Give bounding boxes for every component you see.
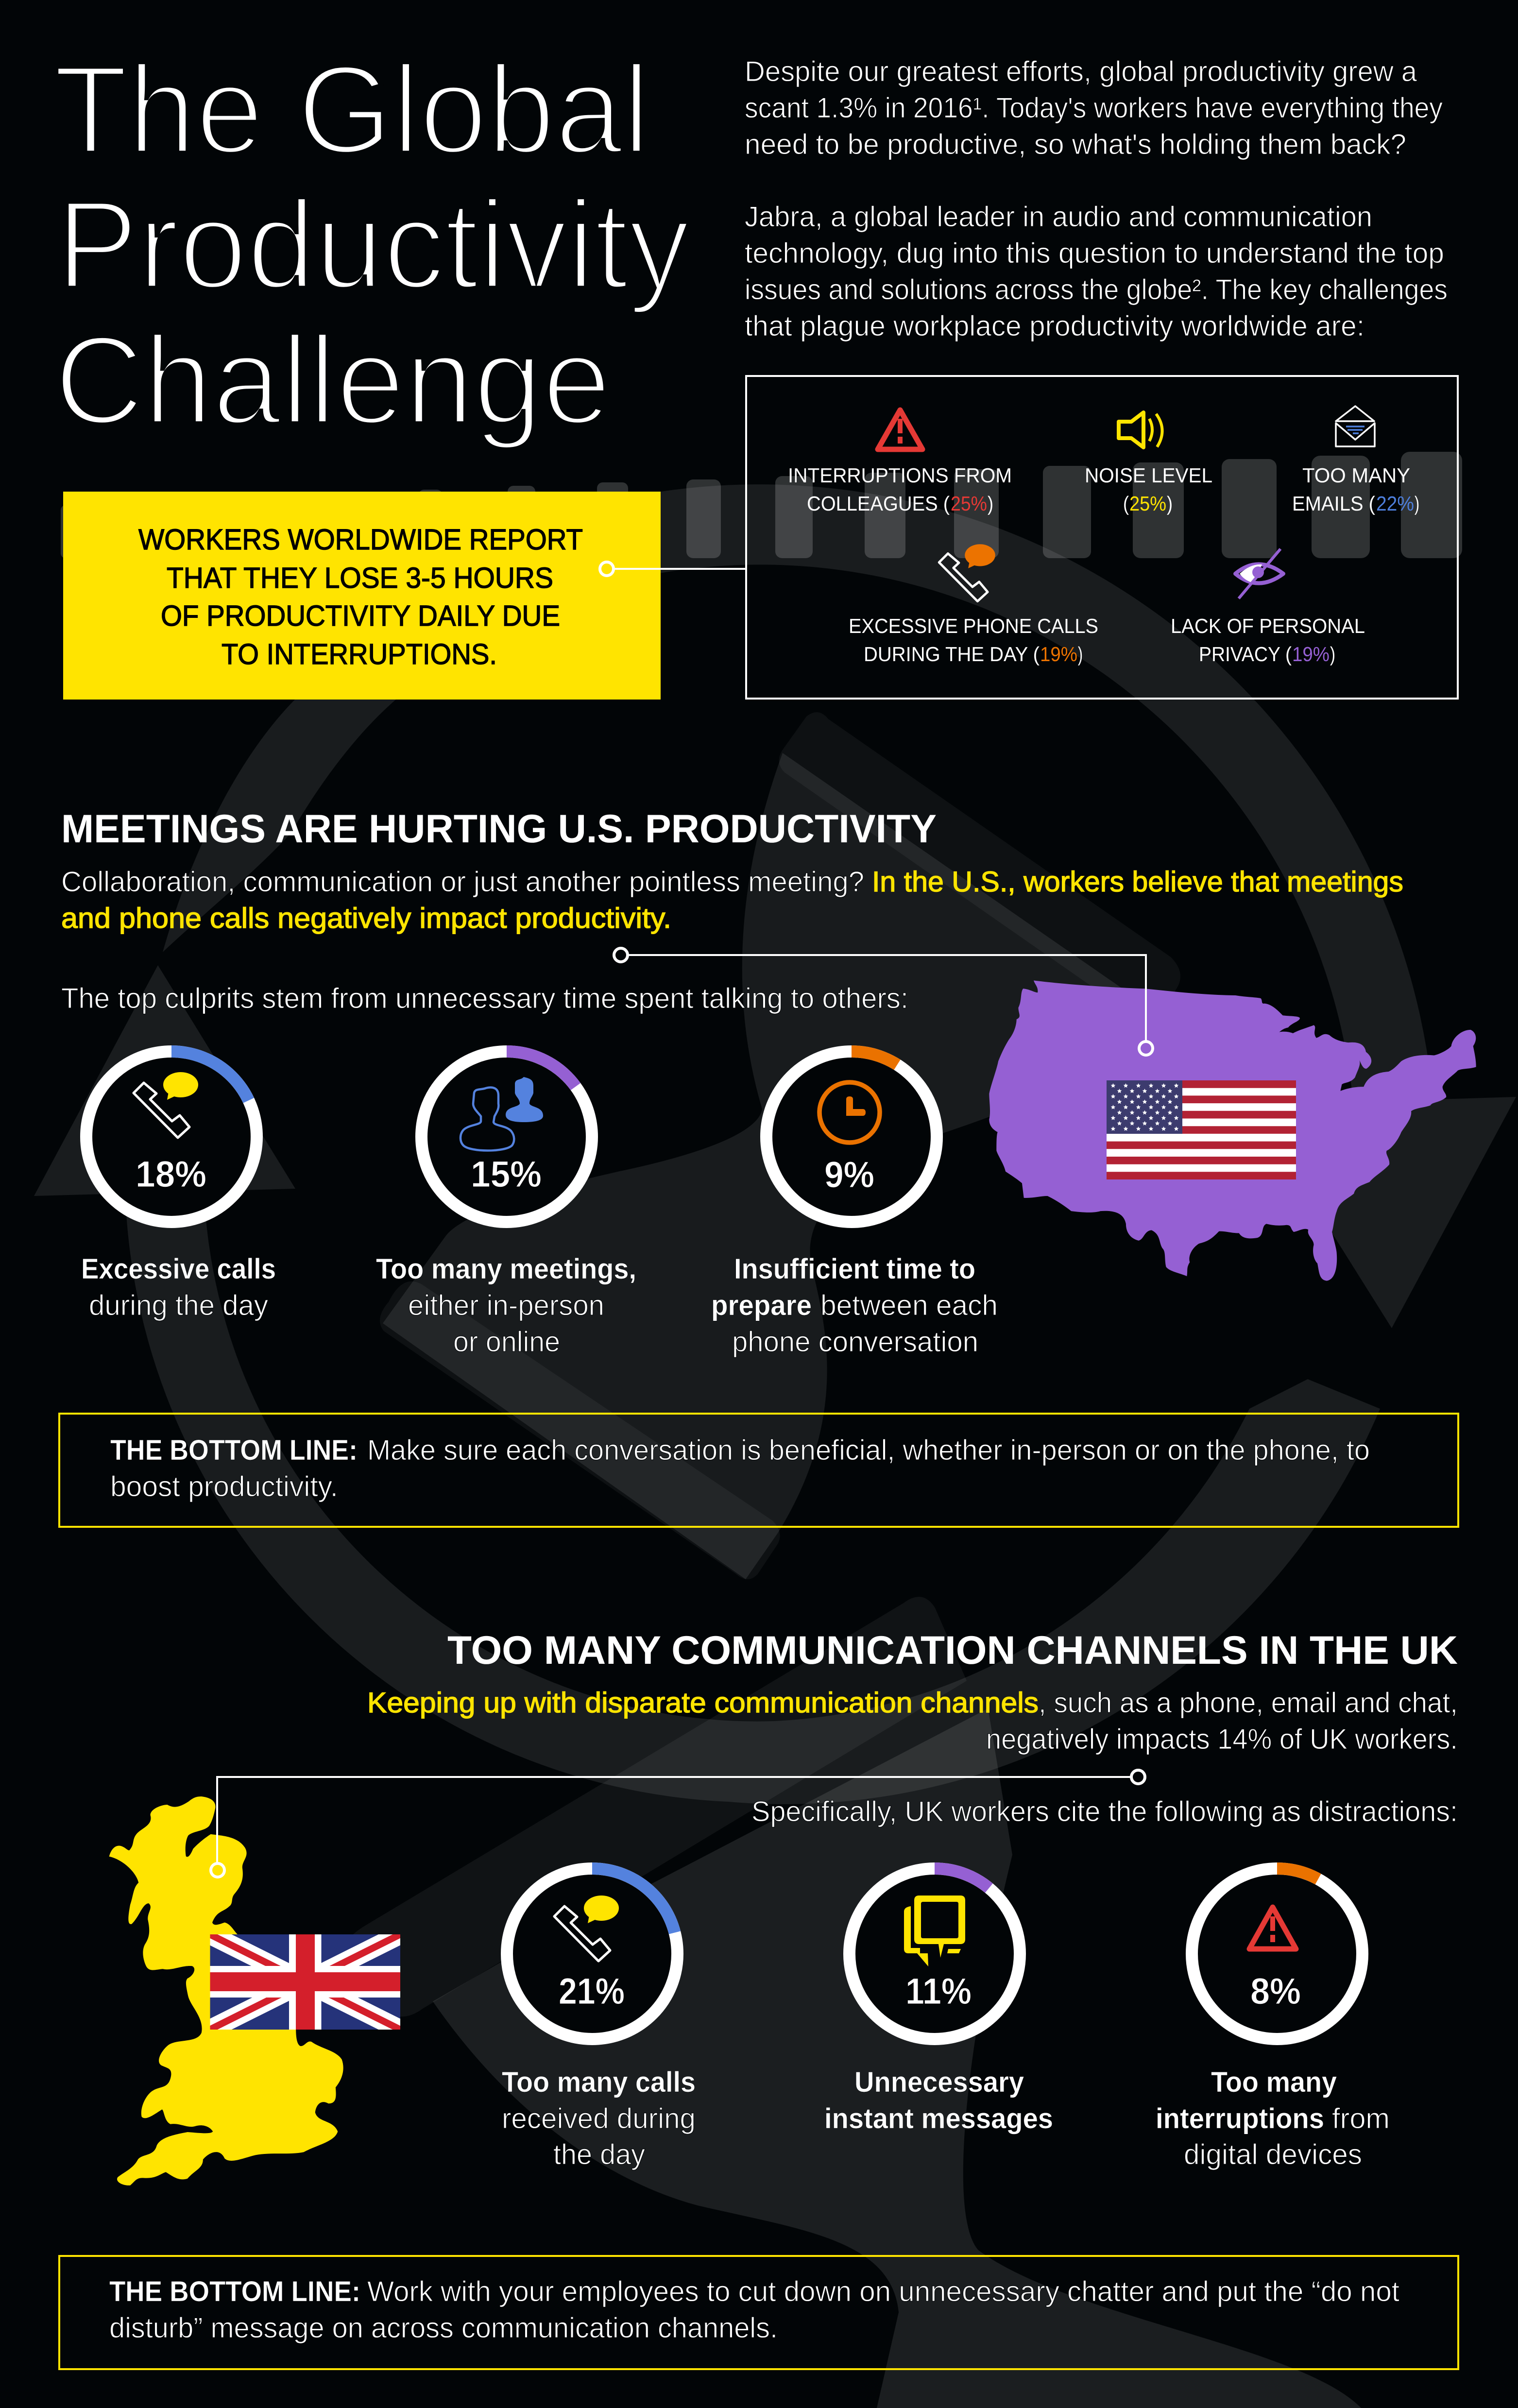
label: too many calls: received during [502, 2102, 696, 2135]
icon: phone with yellow bubble [554, 1896, 619, 1961]
icon: two people [461, 1077, 543, 1150]
value: 21% [559, 1971, 625, 2012]
chart: 18% excessive calls [86, 1051, 256, 1222]
text: meetings intro: The top culprits stem from unnecessary time spent talking to others: [61, 982, 908, 1014]
label: lack of personal privacy: PRIVACY ( [1199, 643, 1292, 666]
label: too many meetings: Too many meetings, [376, 1253, 636, 1285]
label: noise level: NOISE LEVEL [1085, 464, 1212, 487]
icon: phone with yellow bubble [134, 1072, 198, 1138]
icon: message bubbles [904, 1896, 965, 1966]
label: too many meetings: either in-person [408, 1289, 604, 1321]
label: excessive phone calls: 19% [1040, 643, 1077, 666]
intro text: technology, dug into this question to understand the top [745, 237, 1444, 269]
text: meetings intro: Collaboration, communication or just another pointless meeting? [61, 866, 864, 898]
panel: bottom line US: THE BOTTOM LINE: [110, 1434, 358, 1466]
label: excessive phone calls [849, 615, 1098, 666]
panel: bottom line US: boost productivity. [110, 1470, 338, 1503]
label: too many interruptions: from [1332, 2102, 1390, 2135]
panel: bottom line UK: Work with your employees to cut down on unnecessary chatter and put the “do not [367, 2275, 1399, 2307]
callout: yellow box: WORKERS WORLDWIDE REPORT [138, 523, 583, 556]
connector: UK map to text [211, 1770, 1145, 1877]
label: too many calls [502, 2066, 696, 2170]
label: excessive calls [81, 1253, 276, 1321]
label: too many interruptions: digital devices [1184, 2138, 1362, 2170]
label: unnecessary instant messages: instant messages [824, 2102, 1053, 2135]
panel: bottom line UK: disturb” message on across communication channels. [109, 2312, 778, 2344]
intro text: Despite our greatest efforts, global productivity grew a [745, 55, 1417, 87]
text: UK intro [367, 1687, 1458, 1827]
icon: warning triangle [878, 410, 922, 449]
value: 11% [905, 1971, 972, 2012]
intro text: issues and solutions across the globe². The key challenges [745, 273, 1448, 306]
title: Challenge [54, 310, 611, 451]
label: excessive phone calls: EXCESSIVE PHONE CALLS [849, 615, 1098, 637]
text: meetings intro [61, 866, 1403, 1014]
label: noise level [1085, 464, 1212, 515]
label: lack of personal privacy [1171, 615, 1365, 666]
panel: bottom line UK: THE BOTTOM LINE: [109, 2275, 360, 2307]
label: interruptions from colleagues [788, 464, 1012, 515]
label: excessive calls: Excessive calls [81, 1253, 276, 1285]
icon: crossed eye [1235, 549, 1283, 598]
label: insufficient time: Insufficient time to [734, 1253, 975, 1285]
label: excessive calls: during the day [89, 1289, 268, 1321]
map: USA [989, 980, 1476, 1281]
label: noise level: ( [1123, 492, 1129, 515]
chart: 21% too many calls [507, 1868, 677, 2039]
text: UK intro: Keeping up with disparate communication channels [367, 1687, 1039, 1719]
icon: warning triangle [1249, 1907, 1296, 1949]
flag: USA [1107, 1080, 1296, 1179]
intro text: Jabra, a global leader in audio and communication [745, 201, 1372, 233]
chart: 11% instant messages [849, 1868, 1020, 2039]
label: lack of personal privacy: 19% [1292, 643, 1330, 666]
label: interruptions from colleagues: 25% [951, 492, 987, 515]
intro text: that plague workplace productivity worldwide are: [745, 310, 1364, 342]
intro text: scant 1.3% in 2016¹. Today's workers have everything they [745, 92, 1443, 124]
watermark: circular arrows with hourglass [34, 484, 1516, 2408]
title: The Global [53, 39, 650, 180]
flag: UK [210, 1934, 400, 2030]
heading: UK channels: TOO MANY COMMUNICATION CHANNELS IN THE UK [447, 1628, 1458, 1673]
chart: 15% too many meetings [422, 1051, 592, 1222]
label: lack of personal privacy: LACK OF PERSONAL [1171, 615, 1365, 637]
panel: bottom line US [59, 1414, 1458, 1527]
map: UK [109, 1796, 343, 2186]
label: interruptions from colleagues: COLLEAGUES ( [807, 492, 950, 515]
label: insufficient time: prepare [711, 1289, 812, 1321]
label: insufficient time [711, 1253, 998, 1358]
callout: yellow box: TO INTERRUPTIONS. [222, 638, 497, 670]
value: 15% [471, 1154, 542, 1195]
label: too many emails: ) [1415, 492, 1419, 515]
label: too many meetings [376, 1253, 636, 1358]
panel: key challenges [746, 376, 1458, 699]
label: lack of personal privacy: ) [1330, 643, 1335, 666]
label: unnecessary instant messages: Unnecessary [854, 2066, 1024, 2098]
icon: phone with orange bubble [939, 544, 995, 601]
icon: clock [819, 1082, 880, 1143]
intro text [745, 55, 1448, 342]
label: too many interruptions: Too many [1211, 2066, 1337, 2098]
label: excessive phone calls: DURING THE DAY ( [864, 643, 1040, 666]
value: 9% [824, 1154, 874, 1195]
icon: speaker [1119, 412, 1162, 447]
label: unnecessary instant messages [824, 2066, 1053, 2135]
label: too many emails: 22% [1376, 492, 1414, 515]
connector: callout to challenges [600, 562, 745, 576]
label: insufficient time: phone conversation [732, 1326, 978, 1358]
intro text: need to be productive, so what's holding them back? [745, 128, 1406, 160]
title: Productivity [56, 174, 690, 316]
text: UK intro: , such as a phone, email and chat, [1039, 1687, 1458, 1719]
label: insufficient time: between each [820, 1289, 998, 1321]
label: interruptions from colleagues: INTERRUPTIONS FROM [788, 464, 1012, 487]
text: meetings intro: and phone calls negatively impact productivity. [61, 902, 671, 934]
label: too many meetings: or online [453, 1326, 560, 1358]
value: 8% [1250, 1971, 1301, 2012]
label: interruptions from colleagues: ) [988, 492, 993, 515]
watermark: bar row [61, 452, 1462, 558]
text: UK intro: negatively impacts 14% of UK workers. [986, 1723, 1458, 1755]
icon: envelope [1336, 406, 1375, 446]
label: too many calls: the day [553, 2138, 645, 2170]
text: meetings intro: In the U.S., workers believe that meetings [872, 866, 1403, 898]
heading: meetings: MEETINGS ARE HURTING U.S. PRODUCTIVITY [61, 807, 937, 851]
label: too many emails [1292, 464, 1419, 515]
callout: yellow box: OF PRODUCTIVITY DAILY DUE [161, 599, 560, 632]
connector: meetings to map [614, 948, 1153, 1055]
label: noise level: 25% [1129, 492, 1166, 515]
title [53, 39, 690, 451]
label: too many emails: EMAILS ( [1292, 492, 1375, 515]
callout: yellow box [63, 492, 661, 700]
panel: bottom line UK [59, 2256, 1458, 2369]
label: too many calls: Too many calls [502, 2066, 696, 2098]
chart: 8% interruptions [1192, 1868, 1362, 2039]
label: too many emails: TOO MANY [1302, 464, 1410, 487]
value: 18% [136, 1154, 206, 1195]
label: too many interruptions [1156, 2066, 1390, 2170]
text: UK intro: Specifically, UK workers cite the following as distractions: [751, 1795, 1458, 1827]
label: too many interruptions: interruptions [1156, 2102, 1324, 2135]
chart: 9% insufficient time [767, 1051, 937, 1222]
label: excessive phone calls: ) [1078, 643, 1083, 666]
panel: bottom line US: Make sure each conversation is beneficial, whether in-person or on the phone, to [367, 1434, 1370, 1466]
label: noise level: ) [1167, 492, 1173, 515]
callout: yellow box: THAT THEY LOSE 3-5 HOURS [167, 562, 553, 594]
